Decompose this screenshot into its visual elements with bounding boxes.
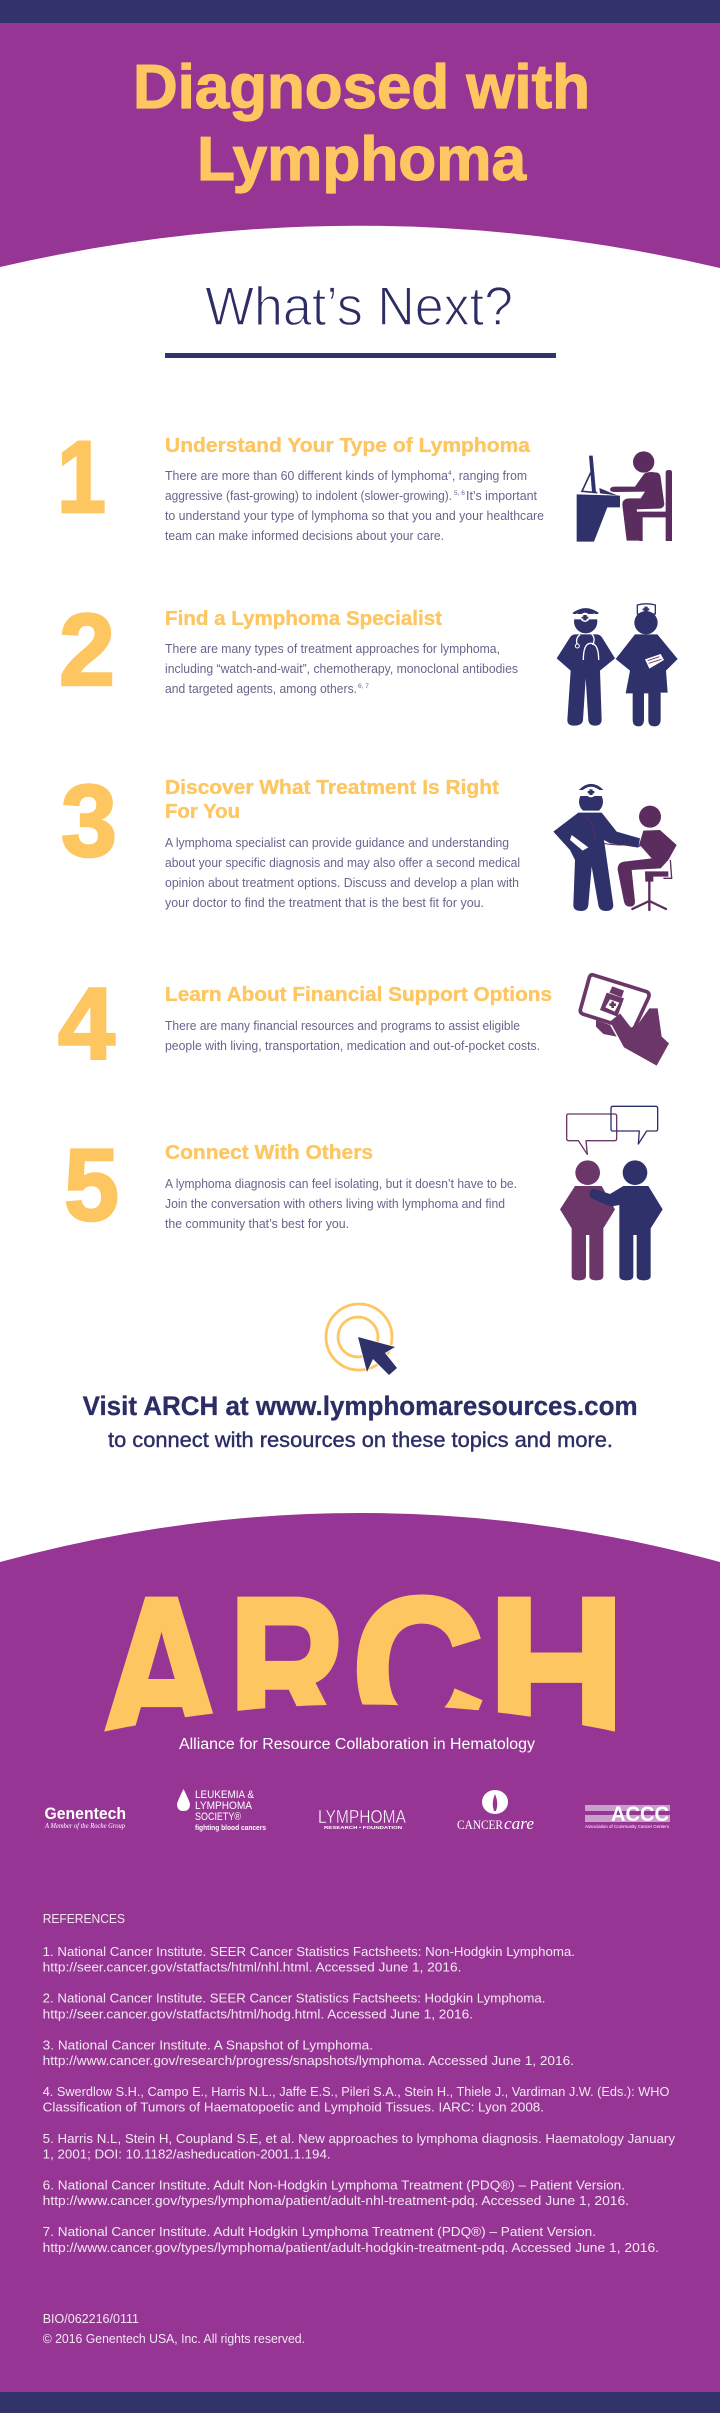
heading 5: Connect With Others — [165, 1141, 373, 1164]
references list: 1, 2001; DOI: 10.1182/asheducation-2001.1.194. — [43, 2146, 331, 2161]
logo: Leukemia and Lymphoma Society — [177, 1789, 266, 1832]
heading 1: Understand Your Type of Lymphoma — [165, 434, 531, 457]
body 4: people with living, transportation, medication and out-of-pocket costs. — [165, 1039, 540, 1053]
number 2: 2 — [59, 593, 115, 707]
title: Diagnosed with — [133, 53, 590, 122]
body 4: There are many financial resources and programs to assist eligible — [165, 1019, 520, 1033]
body 1 — [165, 469, 544, 543]
logo: Lymphoma Research Foundation: RESEARCH • FOUNDATION — [324, 1825, 402, 1830]
references list: 5. Harris N.L, Stein H, Coupland S.E, et al. New approaches to lymphoma diagnosis. Haematology January — [43, 2131, 676, 2146]
body 1: team can make informed decisions about your care. — [165, 529, 444, 543]
logo: Lymphoma Research Foundation: LYMPHOMA — [318, 1806, 407, 1827]
heading 3 — [165, 776, 499, 823]
logo: Genentech: Genentech — [44, 1804, 126, 1823]
ARCH logo wordmark: R — [229, 1556, 345, 1784]
right person — [589, 1160, 663, 1280]
references list: 1. National Cancer Institute. SEER Cancer Statistics Factsheets: Non-Hodgkin Lymphoma. — [43, 1944, 575, 1959]
step 2 panel — [59, 593, 678, 726]
body 5: A lymphoma diagnosis can feel isolating, but it doesn’t have to be. — [165, 1177, 517, 1191]
left person — [560, 1160, 615, 1280]
legal text: BIO/062216/0111 — [43, 2311, 139, 2326]
body 1: , ranging from — [452, 469, 527, 483]
logo: Genentech — [44, 1804, 126, 1830]
number 1: 1 — [57, 420, 106, 534]
body 3: opinion about treatment options. Discuss and develop a plan with — [165, 876, 519, 890]
doctor — [553, 785, 640, 911]
body 2: 6, 7 — [358, 683, 369, 690]
logo: Leukemia and Lymphoma Society: fighting blood cancers — [195, 1823, 266, 1832]
body 5: the community that’s best for you. — [165, 1217, 349, 1231]
step 1 panel — [57, 420, 672, 543]
ARCH logo wordmark: H — [488, 1556, 625, 1784]
body 2: including “watch-and-wait”, chemotherapy, monoclonal antibodies — [165, 662, 518, 676]
icon: two people talking — [560, 1106, 663, 1280]
header panel — [0, 0, 720, 268]
legal text — [43, 2311, 305, 2346]
icon: target with cursor — [326, 1304, 397, 1375]
body 1: aggressive (fast-growing) to indolent (slower-growing). — [165, 489, 452, 503]
body 3: A lymphoma specialist can provide guidance and understanding — [165, 836, 509, 850]
logo: ACCC — [585, 1803, 670, 1829]
heading 2: Find a Lymphoma Specialist — [165, 607, 442, 630]
ARCH logo wordmark: A — [100, 1556, 223, 1784]
footer panel — [0, 1513, 720, 2413]
logo: ACCC: Association of Community Cancer Centers — [585, 1824, 670, 1829]
icon: person at computer — [577, 451, 672, 542]
references list: 2. National Cancer Institute. SEER Cancer Statistics Factsheets: Hodgkin Lymphoma. — [43, 1991, 545, 2006]
references list: http://www.cancer.gov/types/lymphoma/patient/adult-nhl-treatment-pdq. Accessed June 1, 2016. — [43, 2193, 629, 2208]
partner logos — [44, 1789, 670, 1833]
body 1: It’s important — [466, 489, 538, 503]
legal text: © 2016 Genentech USA, Inc. All rights reserved. — [43, 2331, 305, 2346]
logo: Leukemia and Lymphoma Society: SOCIETY® — [195, 1811, 241, 1823]
logo: Leukemia and Lymphoma Society: LEUKEMIA & — [195, 1789, 255, 1801]
patient — [618, 806, 677, 910]
call to action heading: Visit ARCH at www.lymphomaresources.com — [83, 1391, 638, 1421]
nurse figure — [616, 604, 678, 726]
number 5: 5 — [64, 1128, 119, 1242]
body 1: to understand your type of lymphoma so that you and your healthcare — [165, 509, 544, 523]
references list: 7. National Cancer Institute. Adult Hodgkin Lymphoma Treatment (PDQ®) – Patient Version. — [43, 2224, 596, 2239]
references heading: REFERENCES — [43, 1911, 125, 1926]
references list: 6. National Cancer Institute. Adult Non-Hodgkin Lymphoma Treatment (PDQ®) – Patient Version. — [43, 2178, 625, 2192]
logo: CancerCare — [457, 1790, 534, 1833]
body 1: There are more than 60 different kinds of lymphoma — [165, 469, 448, 483]
body 3 — [165, 836, 520, 910]
call to action panel — [83, 1304, 638, 1452]
icon: doctor and nurse — [557, 604, 678, 726]
body 3: your doctor to find the treatment that is the best fit for you. — [165, 896, 484, 910]
logo: CancerCare: care — [504, 1814, 534, 1833]
body 2 — [165, 642, 518, 696]
ARCH logo wordmark: C — [352, 1556, 484, 1784]
call to action subtext: to connect with resources on these topics and more. — [108, 1429, 613, 1452]
title: Lymphoma — [197, 125, 527, 194]
references list: http://www.cancer.gov/research/progress/snapshots/lymphoma. Accessed June 1, 2016. — [43, 2053, 574, 2068]
body 2: and targeted agents, among others. — [165, 682, 357, 696]
logo: CancerCare: CANCER — [457, 1817, 503, 1832]
logo: Genentech: A Member of the Roche Group — [44, 1822, 125, 1830]
number 4: 4 — [58, 967, 115, 1081]
references list: http://seer.cancer.gov/statfacts/html/nhl.html. Accessed June 1, 2016. — [43, 1960, 461, 1975]
title — [133, 53, 590, 194]
references list: 4. Swerdlow S.H., Campo E., Harris N.L., Jaffe E.S., Pileri S.A., Stein H., Thiele J., Vardiman J.W. (Eds.): WHO — [43, 2084, 669, 2099]
doctor figure — [557, 609, 615, 726]
subtitle: What’s Next? — [205, 275, 513, 337]
references list: 3. National Cancer Institute. A Snapshot of Lymphoma. — [43, 2037, 373, 2052]
references list — [43, 1944, 676, 2255]
body 2: There are many types of treatment approaches for lymphoma, — [165, 642, 500, 656]
step 4 panel — [58, 967, 669, 1081]
ARCH logo wordmark — [104, 1594, 615, 1732]
step 3 panel — [61, 764, 677, 911]
body 5: Join the conversation with others living with lymphoma and find — [165, 1197, 505, 1211]
body 3: about your specific diagnosis and may also offer a second medical — [165, 856, 520, 870]
step 5 panel — [64, 1106, 663, 1280]
logo: ACCC: ACCC — [611, 1803, 669, 1826]
icon: hand holding card with medicine bottle — [580, 975, 669, 1066]
heading 3: For You — [165, 800, 240, 823]
body 1: 4 — [448, 470, 452, 477]
references list: Classification of Tumors of Haematopoetic and Lymphoid Tissues. IARC: Lyon 2008. — [43, 2100, 544, 2115]
body 5 — [165, 1177, 517, 1231]
body 1: 5, 6 — [454, 490, 465, 497]
icon: doctor with patient — [553, 785, 677, 911]
references list: http://www.cancer.gov/types/lymphoma/patient/adult-hodgkin-treatment-pdq. Accessed June 1, 2016. — [43, 2240, 659, 2255]
body 4 — [165, 1019, 540, 1053]
references list: http://seer.cancer.gov/statfacts/html/hodg.html. Accessed June 1, 2016. — [43, 2006, 473, 2021]
logo: Leukemia and Lymphoma Society: LYMPHOMA — [195, 1800, 253, 1812]
number 3: 3 — [61, 764, 117, 878]
speech bubbles — [567, 1106, 658, 1154]
heading 4: Learn About Financial Support Options — [165, 983, 552, 1006]
heading 3: Discover What Treatment Is Right — [165, 776, 499, 799]
subtitle rule — [165, 353, 556, 358]
ARCH full name: Alliance for Resource Collaboration in Hematology — [179, 1736, 535, 1753]
